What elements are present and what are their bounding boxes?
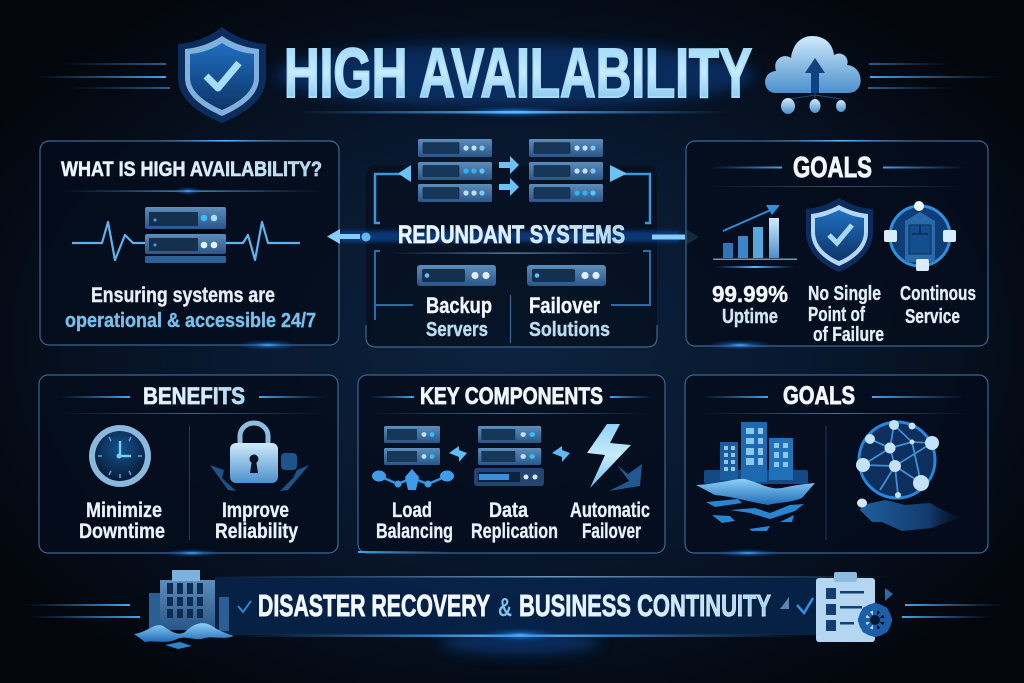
label: improve reliability: Improve xyxy=(222,499,289,522)
heading: BUSINESS CONTINUITY xyxy=(519,588,771,623)
label: continuous service: Service xyxy=(905,306,960,328)
icon: failover server xyxy=(527,265,606,286)
label: minimize downtime: Minimize xyxy=(86,499,162,522)
banner: disaster recovery and business continuity xyxy=(25,570,1003,654)
header glow xyxy=(275,43,755,107)
icon: primary server stack xyxy=(418,139,492,202)
icon: shield xyxy=(806,198,873,272)
icon: server with heartbeat xyxy=(72,207,300,263)
label: load balancing xyxy=(376,499,453,543)
label: failover solutions: Solutions xyxy=(529,319,610,341)
heading: BENEFITS xyxy=(143,383,245,410)
panel: goals top xyxy=(686,140,988,350)
icon: data replication xyxy=(474,426,544,486)
icon: secondary server stack xyxy=(529,139,603,202)
panel: benefits xyxy=(39,375,338,557)
icon: lightning failover xyxy=(587,424,642,491)
label: uptime: 99.99% xyxy=(712,281,788,307)
label: failover solutions: Failover xyxy=(529,293,600,318)
icon: continuous service globe xyxy=(884,201,956,271)
title underline xyxy=(298,106,730,118)
icon: shield xyxy=(178,27,266,123)
label: failover solutions xyxy=(529,293,610,341)
heading: GOALS xyxy=(783,382,855,410)
label: data replication: Replication xyxy=(471,520,558,543)
label: automatic failover: Automatic xyxy=(570,499,650,522)
label: automatic failover: Failover xyxy=(582,520,641,543)
heading: DISASTER RECOVERY xyxy=(258,588,490,623)
icon: load balancing xyxy=(372,426,454,490)
header right speed lines xyxy=(868,63,1000,89)
icon: cloud upload xyxy=(765,36,861,114)
glow band behind heading xyxy=(340,231,680,242)
heading divider xyxy=(60,187,322,195)
label: no single point of failure: of Failure xyxy=(813,324,884,346)
icon: check mark left xyxy=(238,601,251,612)
arrow: redundant to what is HA xyxy=(327,229,370,244)
heading rules xyxy=(710,166,965,187)
heading: WHAT IS HIGH AVAILABILITY? xyxy=(61,158,322,181)
icon: global network in hand xyxy=(856,420,958,531)
icon: backup server xyxy=(417,265,496,286)
label: load balancing: Load xyxy=(392,499,432,522)
icon: uptime chart xyxy=(713,205,797,268)
heading: GOALS xyxy=(793,152,872,184)
heading: & xyxy=(498,592,512,622)
title: HIGH AVAILABILITY xyxy=(284,34,752,112)
heading: REDUNDANT SYSTEMS xyxy=(398,221,625,249)
arrow: replication bottom xyxy=(499,178,519,196)
label: data replication: Data xyxy=(489,499,528,522)
icon: check marks right xyxy=(780,597,813,613)
label: minimize downtime xyxy=(79,499,165,543)
panel: what is high availability xyxy=(40,140,339,350)
panel: redundant systems xyxy=(340,139,680,347)
panel: goals bottom xyxy=(685,375,988,557)
icon: clipboard with gear xyxy=(816,572,893,642)
right speed lines xyxy=(902,604,1003,618)
icon: flooded city xyxy=(696,422,815,531)
arrow: redundant to goals xyxy=(652,229,699,245)
heading xyxy=(258,588,771,623)
label: load balancing: Balancing xyxy=(376,520,453,543)
label: automatic failover xyxy=(570,499,650,543)
icon: building with water xyxy=(134,570,234,649)
arrow xyxy=(552,446,570,462)
description line 1: Ensuring systems are xyxy=(91,284,275,307)
label: uptime xyxy=(712,281,788,328)
label: improve reliability xyxy=(215,499,298,543)
arrow: right top bracket xyxy=(610,165,650,223)
header left speed lines xyxy=(36,63,170,89)
label: uptime: Uptime xyxy=(722,306,778,328)
label: continuous service: Continous xyxy=(900,283,976,305)
icon: clock xyxy=(89,425,151,487)
label: backup servers: Servers xyxy=(426,319,488,341)
arrow: left lower bracket xyxy=(375,251,413,320)
label: backup servers xyxy=(426,293,492,341)
heading: KEY COMPONENTS xyxy=(420,383,603,410)
label: no single point of failure: No Single xyxy=(808,283,881,305)
arrow: left top bracket xyxy=(375,165,411,223)
label: no single point of failure xyxy=(808,283,884,346)
label: improve reliability: Reliability xyxy=(215,520,298,543)
icon: padlock xyxy=(210,423,309,491)
arrow: right lower bracket xyxy=(611,251,650,305)
label: no single point of failure: Point of xyxy=(808,304,865,326)
heading rules xyxy=(370,396,652,414)
description line 2: operational & accessible 24/7 xyxy=(65,310,316,332)
heading rules xyxy=(58,396,325,540)
heading rules xyxy=(702,396,968,540)
label: minimize downtime: Downtime xyxy=(79,520,165,543)
label: data replication xyxy=(471,499,558,543)
arrow xyxy=(449,446,467,462)
label: continuous service xyxy=(900,283,976,328)
panel: key components xyxy=(358,375,665,553)
arrow: replication top xyxy=(499,156,519,174)
label: backup servers: Backup xyxy=(426,293,492,318)
left speed lines xyxy=(25,604,140,618)
